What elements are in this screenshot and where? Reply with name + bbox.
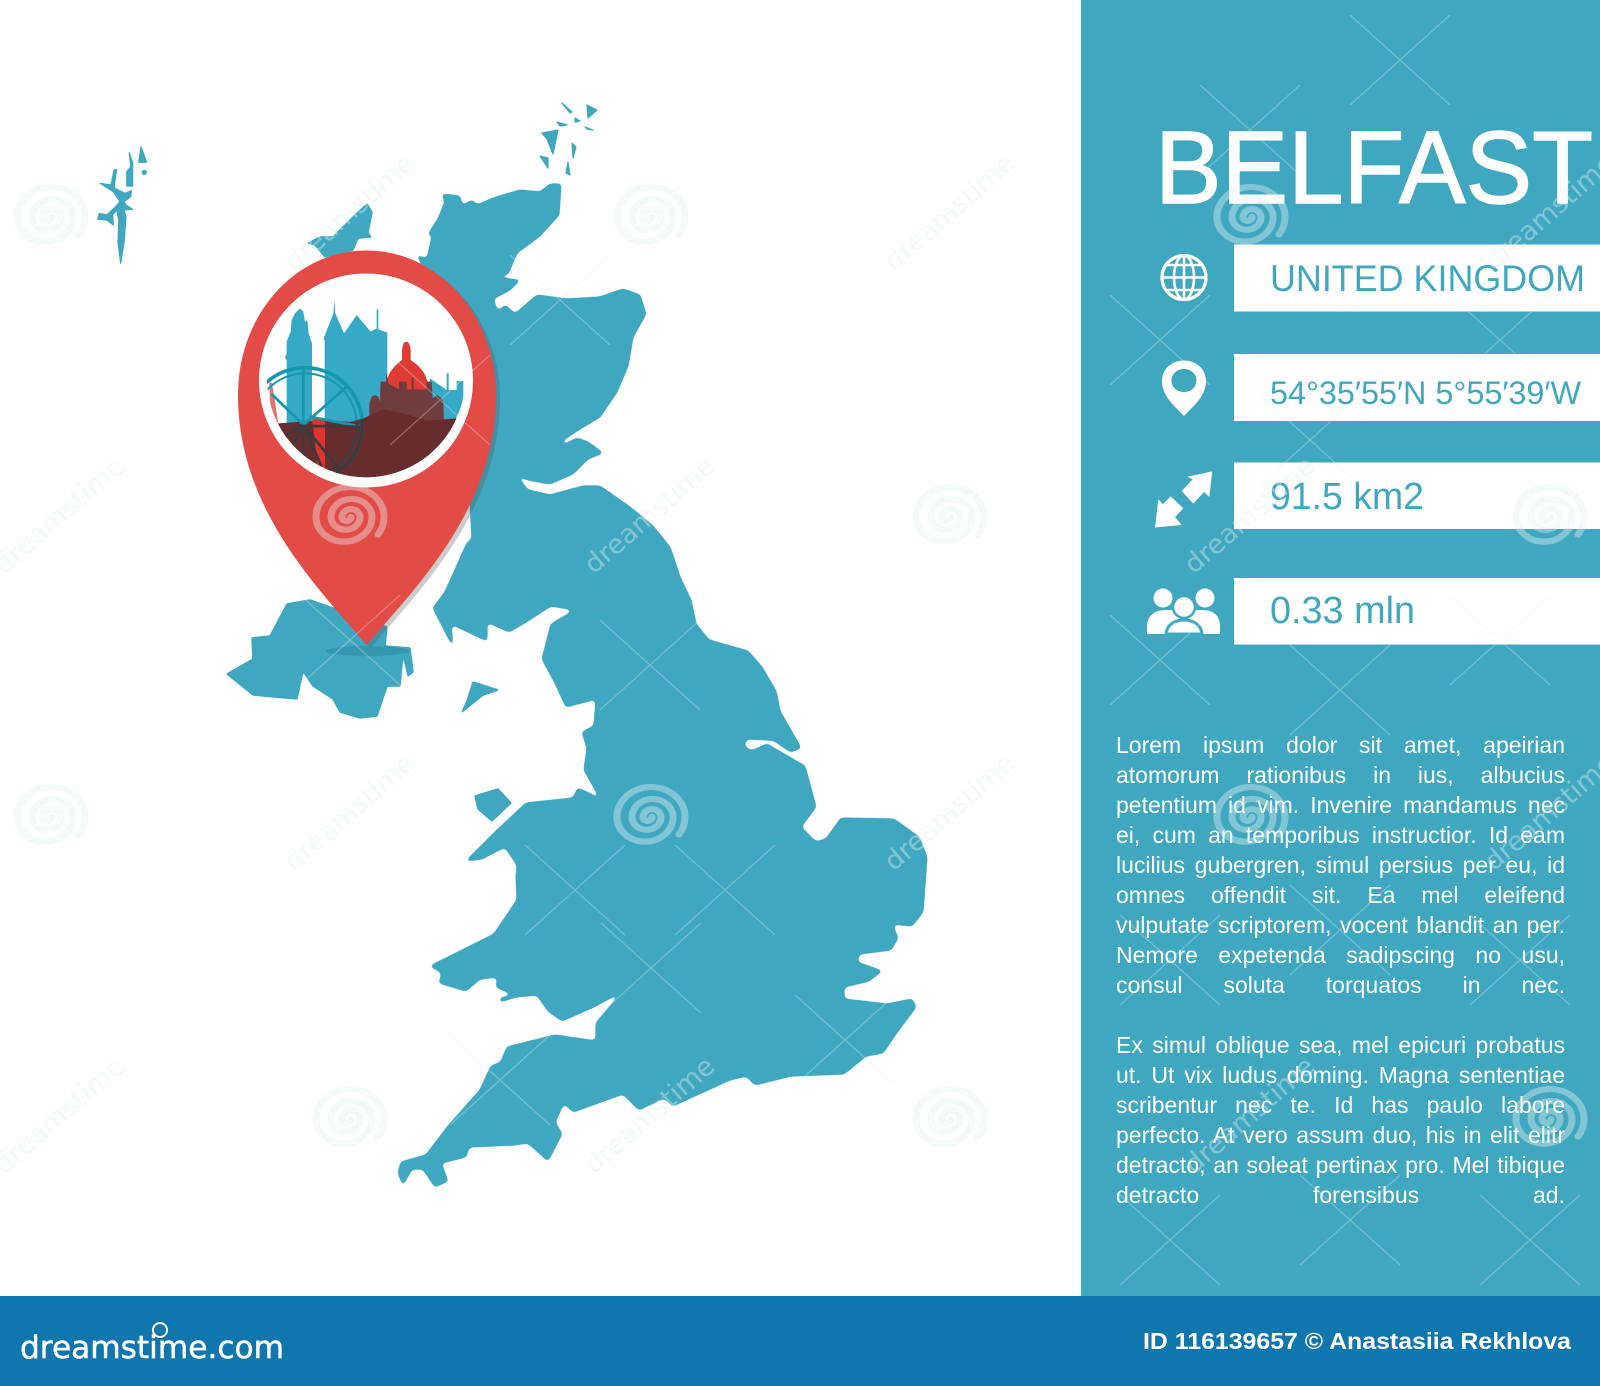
text block: first paragraph: omnes offendit sit. Ea mel eleifend	[1116, 882, 1565, 908]
footer background	[0, 1296, 1600, 1386]
text block: second paragraph	[1116, 1032, 1565, 1208]
tower	[285, 308, 312, 427]
big wheel	[267, 366, 364, 474]
row: country	[1162, 244, 1600, 312]
watermark spirals and wordmarks: dreamstime	[1178, 1050, 1321, 1180]
coordinates text: 54°35′55′N 5°55′39′W	[1270, 375, 1582, 411]
population bar	[1234, 578, 1600, 644]
icon: globe	[1162, 256, 1206, 300]
map: Anglesey	[475, 789, 511, 821]
coordinates bar	[1234, 354, 1600, 421]
watermark spirals and wordmarks: dreamstime	[878, 147, 1021, 277]
city hall building	[369, 372, 444, 421]
area bar	[1234, 462, 1600, 529]
watermark crossing lines	[300, 15, 1580, 1285]
text block: second paragraph: perfecto. At vero assum duo, his in elit elitr	[1116, 1122, 1565, 1148]
pin ground shadow	[326, 646, 410, 656]
footer bar	[0, 1296, 1600, 1386]
text block: second paragraph: detracto, an soleat pertinax pro. Mel tibique	[1116, 1152, 1565, 1178]
icon: people	[1147, 588, 1220, 634]
map: Northern Ireland	[227, 600, 413, 718]
area text: 91.5 km2	[1270, 476, 1424, 518]
pin drop shadow	[242, 254, 500, 648]
text block: first paragraph: Lorem ipsum dolor sit amet, apeirian	[1116, 732, 1565, 758]
text block: first paragraph	[1116, 732, 1565, 998]
watermark spirals and wordmarks: dreamstime	[878, 747, 1021, 877]
text block: first paragraph: vulputate scriptorem, vocent blandit an per.	[1116, 912, 1565, 938]
country bar	[1234, 244, 1600, 312]
row: population	[1147, 578, 1600, 644]
row: area	[1155, 462, 1600, 529]
text block: second paragraph: scribentur nec te. Id has paulo labore	[1116, 1092, 1565, 1118]
map: Orkney and Shetland islands	[540, 103, 597, 175]
wheel over ground	[284, 418, 364, 474]
map: United Kingdom	[98, 103, 927, 1187]
pin body	[238, 250, 496, 645]
population text: 0.33 mln	[1270, 590, 1415, 632]
footer logo: dreamstime.com	[20, 1330, 284, 1366]
panel: city facts	[1081, 0, 1600, 1296]
icon: double arrow	[1155, 471, 1212, 528]
text block: second paragraph: detracto forensibus ad.	[1116, 1182, 1565, 1208]
location pin with Belfast skyline	[238, 250, 500, 656]
text block: first paragraph: petentium id vim. Invenire mandamus nec	[1116, 792, 1565, 818]
foreground ground	[278, 410, 457, 478]
small building	[430, 373, 463, 423]
red strip	[312, 418, 325, 468]
skyline illustration	[267, 300, 464, 478]
text block: first paragraph: atomorum rationibus in ius, albucius	[1116, 762, 1565, 788]
red left edge	[269, 382, 278, 424]
footer credit: ID 116139657 © Anastasiia Rekhlova	[1143, 1328, 1571, 1354]
watermark spirals and wordmarks: dreamstime	[278, 147, 421, 277]
watermark spirals and wordmarks: dreamstime	[578, 450, 721, 580]
map: Isle of Man	[462, 682, 498, 712]
map: Outer islands, upper left	[98, 147, 147, 263]
title: BELFAST	[1155, 110, 1593, 225]
watermark spirals and wordmarks	[0, 147, 1600, 1180]
office building	[323, 301, 387, 427]
row: coordinates	[1162, 354, 1600, 421]
text block: second paragraph: ut. Ut vix ludus doming. Magna sententiae	[1116, 1062, 1565, 1088]
text block: second paragraph: Ex simul oblique sea, mel epicuri probatus	[1116, 1032, 1565, 1058]
city hall dome	[386, 342, 428, 392]
pin white circle	[259, 274, 473, 488]
map: Inner Hebrides	[308, 204, 372, 257]
text block: first paragraph: Nemore expetenda sadipscing no usu,	[1116, 942, 1565, 968]
watermark spirals and wordmarks: dreamstime	[278, 747, 421, 877]
text block: first paragraph: consul soluta torquatos in nec.	[1116, 972, 1565, 998]
text block: first paragraph: lucilius gubergren, simul persius per eu, id	[1116, 852, 1565, 878]
icon: location pin	[1162, 360, 1206, 416]
watermark spirals and wordmarks: dreamstime	[1178, 450, 1321, 580]
watermark spirals and wordmarks: dreamstime	[578, 1050, 721, 1180]
map: Great Britain mainland	[398, 184, 927, 1187]
text block: first paragraph: ei, cum an temporibus instructior. Id eam	[1116, 822, 1565, 848]
panel background	[1081, 0, 1600, 1296]
country text: UNITED KINGDOM	[1270, 258, 1585, 299]
